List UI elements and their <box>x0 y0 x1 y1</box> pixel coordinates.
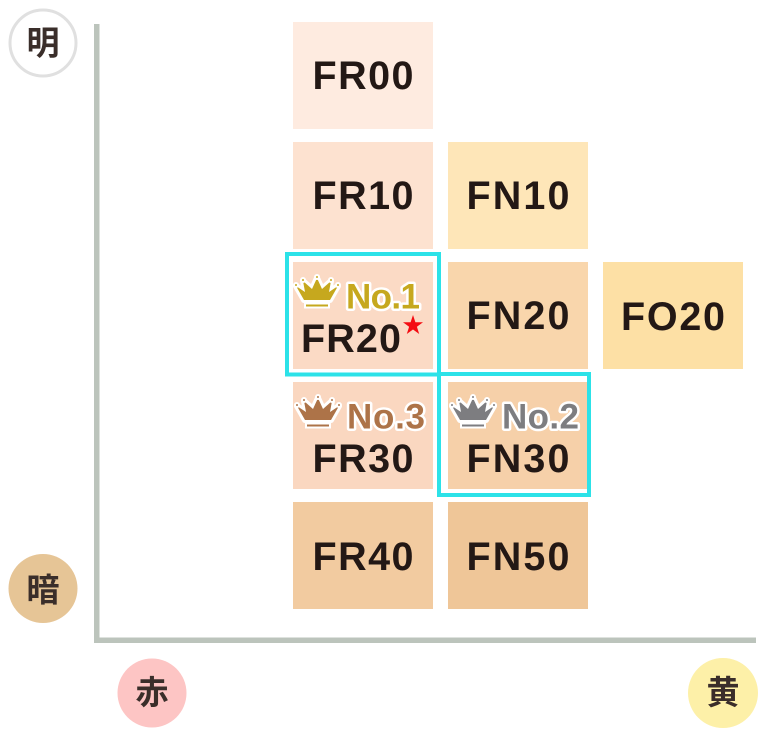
swatch FN50 <box>448 502 588 609</box>
swatch FR30: FR30 <box>312 437 414 481</box>
swatch FN30 <box>448 382 588 489</box>
label: bright <box>10 10 76 76</box>
rank No.1: No.1 <box>346 278 420 316</box>
highlight frame FN30 <box>439 374 589 495</box>
swatch FR20: FR20 <box>301 317 401 361</box>
rank No.3 <box>295 395 425 436</box>
swatch FN50: FN50 <box>466 535 570 579</box>
swatch FN30: FN30 <box>466 437 570 481</box>
swatch FN20: FN20 <box>466 294 570 338</box>
swatch FR00: FR00 <box>312 54 414 98</box>
icon: silver crown <box>450 395 496 428</box>
swatch FR00 <box>293 22 433 129</box>
label: dark <box>8 554 78 623</box>
rank No.3: No.3 <box>347 398 425 436</box>
rank No.2: No.2 <box>502 398 579 436</box>
rank No.2 <box>450 395 579 436</box>
label: bright: 明 <box>26 24 60 62</box>
label: yellow: 黄 <box>706 674 740 711</box>
label: red: 赤 <box>136 674 168 711</box>
vertical axis <box>94 24 100 643</box>
label: red <box>118 658 186 728</box>
swatch FR10 <box>293 142 433 249</box>
red star <box>403 315 423 334</box>
highlight frame FR20 <box>287 254 439 374</box>
swatch FR10: FR10 <box>312 174 414 218</box>
swatch FN10 <box>448 142 588 249</box>
swatch FR40: FR40 <box>312 535 414 579</box>
icon: gold crown <box>294 275 340 308</box>
swatch FN20 <box>448 262 588 369</box>
horizontal axis <box>94 638 756 643</box>
swatch FN10: FN10 <box>466 174 570 218</box>
swatch FR40 <box>293 502 433 609</box>
swatch FO20: FO20 <box>621 295 725 339</box>
label: dark: 暗 <box>26 572 60 608</box>
label: yellow <box>688 658 758 728</box>
rank No.1 <box>294 275 420 316</box>
swatch FR30 <box>293 382 433 489</box>
icon: bronze crown <box>295 395 341 428</box>
swatch FR20 <box>293 262 433 369</box>
swatch FO20 <box>603 262 743 369</box>
